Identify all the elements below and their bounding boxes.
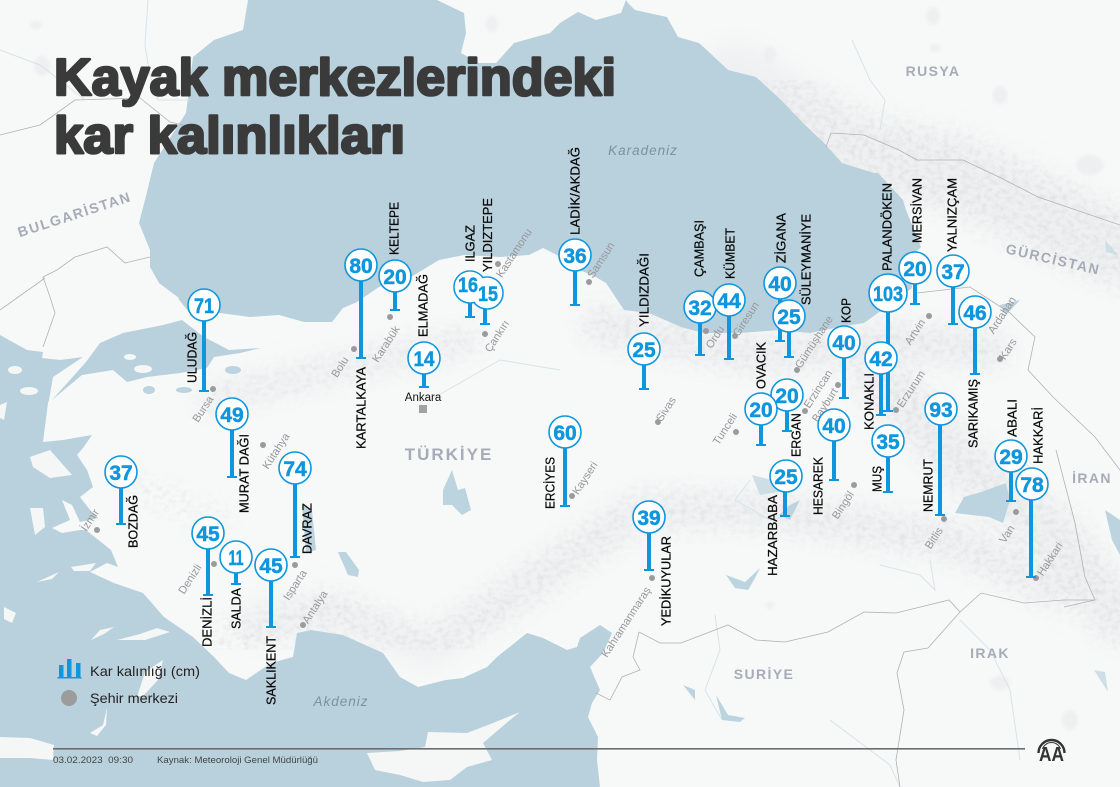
pin: Saklıkent 45: 45	[259, 555, 283, 578]
pin: Ovacık 20	[745, 342, 777, 446]
city: Bolu: Bolu	[329, 355, 352, 380]
pin: Hazarbaba 25	[765, 460, 802, 576]
pin: Bozdağ 37	[105, 456, 140, 548]
map: Black Sea	[139, 0, 921, 333]
pin: Murat Dağı 49: MURAT DAĞI	[236, 434, 252, 513]
pin: Palandöken 103	[869, 183, 907, 412]
city: Van: Van	[997, 523, 1018, 546]
city: Kars: Kars	[997, 336, 1020, 362]
pin: Kartalkaya 80: 80	[349, 255, 373, 278]
pin: Muş 35: MUŞ	[870, 466, 884, 492]
pin: Palandöken 103: PALANDÖKEN	[880, 183, 894, 271]
city: Gümüşhane: Gümüşhane	[793, 314, 836, 371]
sea label: Karadeniz: Karadeniz	[608, 143, 678, 158]
pin: Ladik/Akdağ 36: 36	[563, 245, 587, 268]
footer: source: Kaynak: Meteoroloji Genel Müdürlüğü	[157, 755, 318, 766]
country label: Bulgaristan: BULGARİSTAN	[16, 188, 133, 240]
pin: Elmadağ 14: 14	[414, 348, 435, 371]
pin: Çambaşı 32: ÇAMBAŞI	[692, 220, 706, 277]
city: Karabük: Karabük	[370, 324, 403, 365]
pin: Konaklı 42	[862, 342, 897, 430]
pin: Denizli 45	[192, 517, 224, 647]
city: Van	[997, 509, 1019, 546]
pin: Keltepe 20: KELTEPE	[386, 202, 402, 255]
city: Kastamonu: Kastamonu	[494, 227, 535, 280]
city: Denizli: Denizli	[176, 562, 205, 596]
pin: Elmadağ 14	[408, 274, 440, 388]
pin: Süleymaniye 25	[773, 214, 814, 358]
pin: Saklıkent 45: SAKLIKENT	[264, 636, 278, 705]
pin: Süleymaniye 25: 25	[777, 306, 801, 329]
country label: Irak: IRAK	[970, 645, 1010, 661]
city: Kütahya: Kütahya	[260, 430, 293, 472]
pin: Hakkari 78: HAKKARİ	[1030, 407, 1046, 464]
pin: Çambaşı 32	[684, 220, 716, 356]
pin: Salda 11: SALDA	[228, 588, 244, 629]
country label: Türkiye: TÜRKİYE	[405, 445, 493, 464]
map: islands	[0, 354, 520, 782]
pin: Ovacık 20: OVACIK	[754, 342, 768, 389]
pin: Bozdağ 37: 37	[109, 462, 133, 485]
city: Tunceli: Tunceli	[711, 411, 740, 447]
map: Cyprus	[367, 712, 520, 782]
city: Ankara capital	[405, 392, 442, 413]
city: Bolu	[329, 346, 357, 380]
city: Bursa: Bursa	[191, 393, 217, 425]
pin: Nemrut 93	[920, 393, 957, 516]
pin: Erciyes 60: 60	[553, 422, 577, 445]
pin: Saklıkent 45	[255, 549, 287, 705]
country label: İran: İRAN	[1072, 470, 1112, 486]
pin: Süleymaniye 25: SÜLEYMANİYE	[798, 214, 814, 305]
city: Kayseri: Kayseri	[570, 460, 601, 497]
pin: Ovacık 20: 20	[749, 399, 773, 422]
title	[54, 49, 616, 165]
city: Sivas: Sivas	[654, 394, 679, 424]
pin: Yedikuyular 39: 39	[637, 507, 661, 530]
logo: AA: AA	[1039, 744, 1064, 766]
legend icon: snow depth bars	[58, 659, 82, 678]
pin: Nemrut 93: 93	[929, 399, 953, 422]
pin: Muş 35	[870, 425, 904, 493]
pin: Sarıkamış 46: 46	[963, 302, 987, 325]
pin: Yıldızdağı 25: 25	[632, 339, 656, 362]
pin: Uludağ 71: 71	[194, 295, 214, 318]
footer: date: 03.02.2023 09:30	[53, 755, 133, 766]
footer rule	[53, 748, 1025, 750]
map: Aegean and Mediterranean	[0, 335, 612, 787]
pins: Ilgaz 16 and Yıldıztepe 15 (merged bubbles): 16	[458, 274, 478, 297]
legend	[58, 659, 200, 706]
pin: Kümbet 44: KÜMBET	[722, 228, 738, 279]
pin: Yedikuyular 39	[633, 501, 674, 626]
pin: Konaklı 42: 42	[869, 348, 893, 371]
sea label: Akdeniz: Akdeniz	[312, 694, 369, 709]
country label: Suriye: SURİYE	[734, 666, 794, 682]
pin: Ergan 20: 20	[775, 385, 799, 408]
pin: Salda 11	[220, 541, 252, 629]
pin: Hazarbaba 25: 25	[774, 466, 798, 489]
pins: Ilgaz 16 and Yıldıztepe 15 (merged bubbles): YILDIZTEPE	[480, 198, 495, 272]
pin: Nemrut 93: NEMRUT	[920, 459, 936, 512]
city: Denizli	[176, 561, 217, 596]
pin: Abalı 29: 29	[999, 446, 1023, 469]
pin: Murat Dağı 49	[216, 398, 252, 513]
pin: Uludağ 71: ULUDAĞ	[184, 332, 200, 383]
city: Kahramanmaraş: Kahramanmaraş	[599, 585, 654, 660]
pin: Abalı 29	[995, 399, 1027, 502]
city: Ardahan: Ardahan	[986, 295, 1019, 336]
city: Bayburt: Bayburt	[810, 386, 841, 425]
pin: Erciyes 60	[542, 416, 581, 509]
pin: Ladik/Akdağ 36	[559, 147, 591, 306]
pin: Yalnızçam 37: YALNIZÇAM	[944, 178, 960, 252]
pins: Ilgaz 16 and Yıldıztepe 15 (merged bubbles): 15	[478, 283, 498, 306]
pin: Kop 40	[828, 298, 860, 399]
pin: Yedikuyular 39: YEDİKUYULAR	[658, 536, 674, 626]
pin: Hazarbaba 25: HAZARBABA	[765, 495, 780, 576]
map: Bosphorus	[179, 298, 190, 312]
legend text: city centre: Şehir merkezi	[90, 690, 178, 706]
city: Çankırı: Çankırı	[483, 318, 512, 355]
pin: Yıldızdağı 25	[628, 253, 660, 390]
pin: Hesarek 40: 40	[822, 415, 846, 438]
pin: Hakkari 78	[1016, 407, 1048, 578]
pin: Zigana 40: 40	[768, 273, 792, 296]
pin: Kartalkaya 80: KARTALKAYA	[354, 367, 368, 449]
pin: Yıldızdağı 25: YILDIZDAĞI	[636, 253, 652, 327]
pin: Sarıkamış 46: SARIKAMIŞ	[966, 379, 980, 448]
pin: Denizli 45: DENİZLİ	[200, 597, 214, 647]
legend text: snow depth: Kar kalınlığı (cm)	[90, 663, 200, 679]
legend icon: city dot	[61, 690, 77, 706]
pin: Hesarek 40	[810, 409, 850, 515]
city: Erzincan: Erzincan	[802, 368, 835, 411]
pin: Kop 40: KOP	[838, 298, 854, 323]
pin: Keltepe 20	[379, 202, 411, 311]
map: lakes and rivers	[143, 240, 1120, 722]
city: Ankara capital: Ankara	[405, 392, 442, 404]
pin: Konaklı 42: KONAKLI	[862, 373, 876, 430]
pin: Elmadağ 14: ELMADAĞ	[416, 274, 430, 337]
pin: Zigana 40: ZİGANA	[774, 213, 788, 263]
pin: Kop 40: 40	[832, 332, 856, 355]
pin: Mersivan 20: MERSİVAN	[910, 178, 924, 243]
city: Hakkari: Hakkari	[1035, 540, 1066, 578]
pin: Davraz 74	[279, 452, 314, 558]
pin: Kümbet 44	[713, 228, 745, 360]
pin: Uludağ 71	[184, 289, 220, 392]
city: Antalya: Antalya	[300, 588, 331, 626]
pin: Palandöken 103: 103	[873, 283, 903, 306]
city: Bitlis: Bitlis	[923, 525, 946, 551]
pin: Salda 11: 11	[228, 547, 244, 570]
pin: Mersivan 20: 20	[903, 258, 927, 281]
city: Erzurum: Erzurum	[895, 369, 928, 410]
pin: Sarıkamış 46	[959, 296, 991, 448]
pin: Abalı 29: ABALI	[1004, 399, 1020, 437]
pin: Bozdağ 37: BOZDAĞ	[126, 495, 140, 548]
pin: Davraz 74: 74	[283, 458, 307, 481]
pin: Ergan 20	[771, 379, 804, 457]
pin: Erciyes 60: ERCİYES	[542, 457, 558, 509]
pin: Murat Dağı 49: 49	[220, 404, 244, 427]
title: Kayak merkezlerindeki	[54, 49, 616, 107]
city: Bitlis	[923, 516, 947, 551]
pins: Ilgaz 16 and Yıldıztepe 15 (merged bubbles): ILGAZ	[462, 225, 478, 262]
city: Artvin: Artvin	[903, 317, 928, 347]
country label: Gürcistan: GÜRCİSTAN	[1004, 240, 1102, 278]
pin: Mersivan 20	[899, 178, 931, 305]
map: Sea of Marmara	[52, 320, 261, 400]
pin: Çambaşı 32: 32	[688, 297, 712, 320]
city: Bingöl: Bingöl	[830, 489, 857, 521]
city: Samsun: Samsun	[585, 240, 618, 281]
pin: Ladik/Akdağ 36: LADİK/AKDAĞ	[568, 147, 582, 235]
country label: Rusya: RUSYA	[906, 63, 960, 79]
pin: Kümbet 44: 44	[717, 290, 741, 313]
pin: Zigana 40	[764, 213, 796, 342]
pin: Muş 35: 35	[876, 431, 900, 454]
pin: Keltepe 20: 20	[383, 266, 407, 289]
pin: Davraz 74: DAVRAZ	[300, 503, 314, 554]
city: Giresun: Giresun	[731, 300, 762, 339]
pins: Ilgaz 16 and Yıldıztepe 15 (merged bubbles)	[454, 198, 503, 325]
pin: Yalnızçam 37	[937, 178, 969, 325]
pin: Denizli 45: 45	[196, 523, 220, 546]
pin: Hesarek 40: HESAREK	[810, 457, 826, 515]
pin: Ergan 20: ERGAN	[788, 413, 804, 457]
pin: Hakkari 78: 78	[1020, 474, 1044, 497]
pin: Kartalkaya 80	[345, 249, 377, 449]
title: kar kalınlıkları	[54, 107, 405, 165]
city: Isparta: Isparta	[281, 567, 310, 603]
pin: Yalnızçam 37: 37	[941, 261, 965, 284]
city: İzmir: İzmir	[78, 506, 102, 534]
city: Ordu: Ordu	[704, 324, 727, 351]
